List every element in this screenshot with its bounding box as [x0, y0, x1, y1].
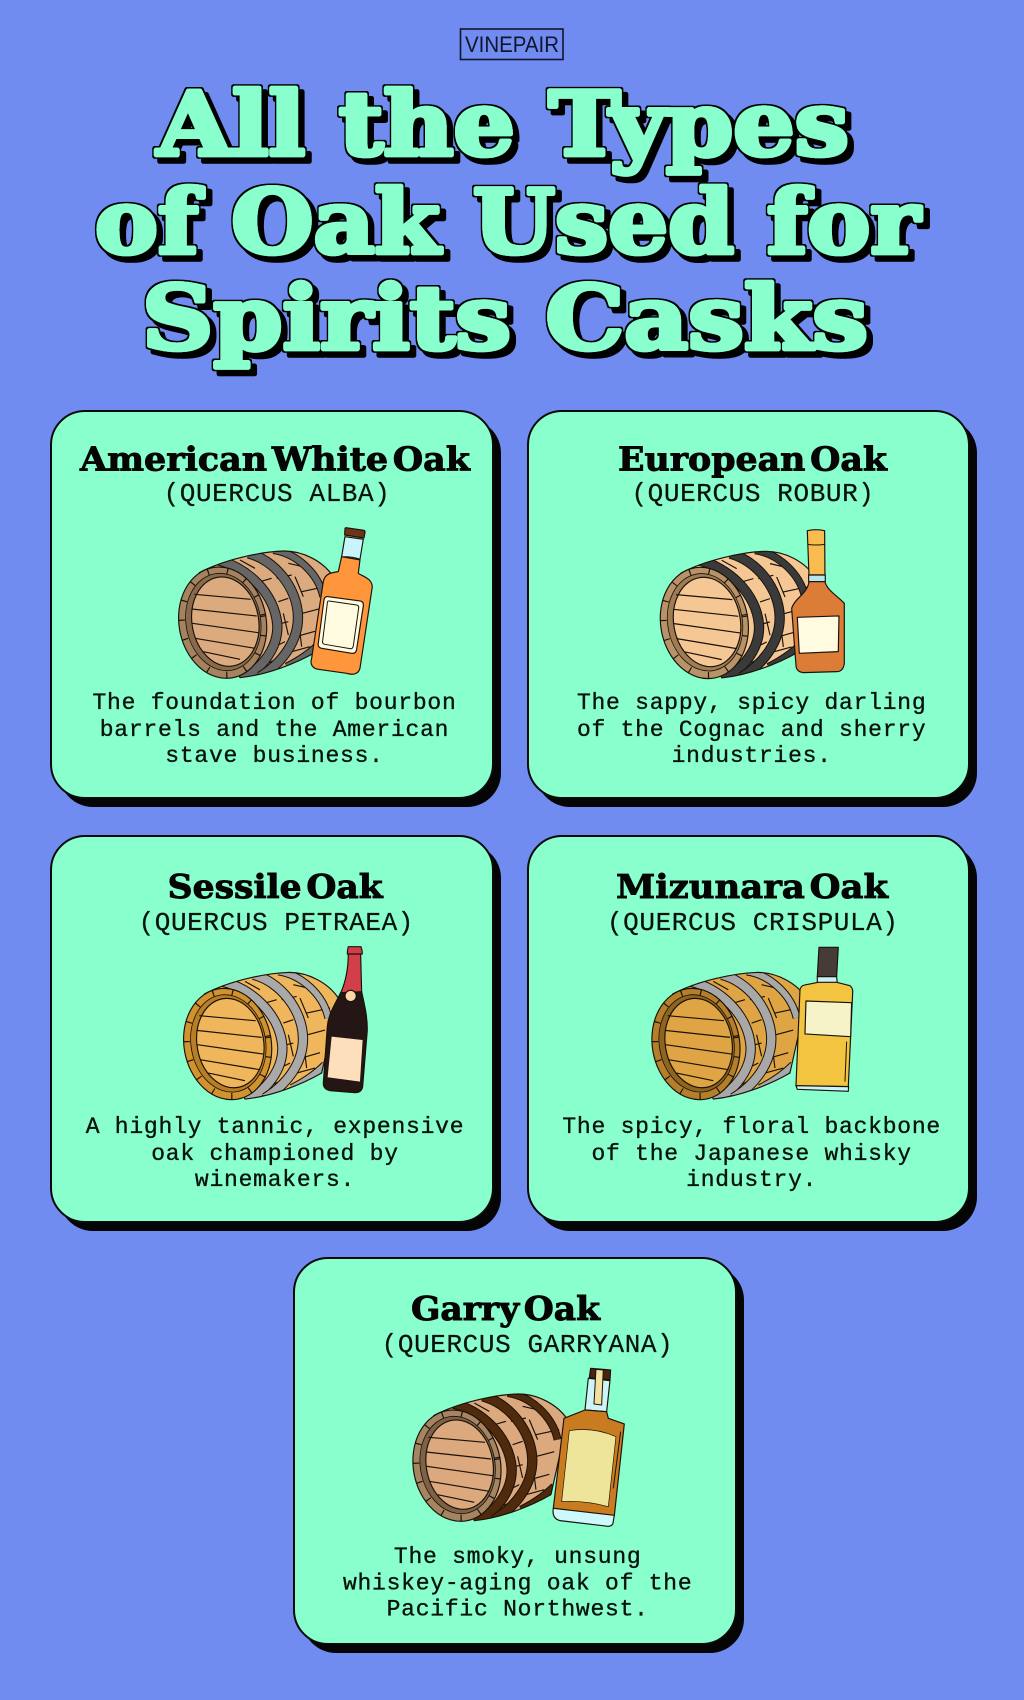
icon: barrel: [175, 971, 338, 1107]
latin name: Quercus petraea: (QUERCUS PETRAEA): [139, 908, 414, 938]
heading: Garry Oak: Garry Oak: [411, 1289, 601, 1328]
description: industry.: [686, 1167, 817, 1193]
logo: VinePair: VINEPAIR: [465, 32, 559, 57]
description: [86, 1114, 464, 1193]
description: [343, 1544, 692, 1623]
description: of the Cognac and sherry: [577, 717, 926, 743]
description: [92, 690, 457, 769]
description: [577, 690, 926, 769]
description: The smoky, unsung: [394, 1544, 641, 1570]
description: The foundation of bourbon: [92, 690, 457, 716]
icon: barrel: [170, 550, 333, 685]
title: [95, 72, 922, 370]
panel: Garry Oak: [294, 1258, 744, 1653]
heading: European Oak: European Oak: [618, 440, 888, 479]
description: of the Japanese whisky: [592, 1141, 912, 1167]
icon: whiskey bottle: [553, 1368, 624, 1526]
description: The spicy, floral backbone: [562, 1114, 941, 1140]
icon: wine bottle: [323, 947, 367, 1093]
title: All the Types: [156, 72, 849, 176]
heading: Mizunara Oak: Mizunara Oak: [616, 867, 889, 906]
panel: European Oak: [528, 411, 977, 807]
title: Spirits Casks: [142, 266, 868, 370]
latin name: Quercus garryana: (QUERCUS GARRYANA): [382, 1330, 673, 1360]
description: winemakers.: [195, 1167, 355, 1193]
panel: Mizunara Oak: [528, 836, 977, 1231]
icon: barrel: [652, 550, 815, 686]
heading: American White Oak: American White Oak: [79, 440, 471, 479]
latin name: Quercus robur: (QUERCUS ROBUR): [631, 479, 875, 509]
icon: barrel: [643, 971, 807, 1107]
description: whiskey-aging oak of the: [343, 1571, 692, 1597]
description: Pacific Northwest.: [387, 1597, 649, 1623]
heading: Sessile Oak: Sessile Oak: [168, 867, 384, 906]
description: The sappy, spicy darling: [577, 690, 926, 716]
description: oak championed by: [151, 1141, 399, 1167]
icon: orange bottle: [311, 528, 372, 674]
panel: Sessile Oak: [51, 836, 501, 1231]
description: stave business.: [165, 743, 384, 769]
icon: whisky bottle: [796, 947, 853, 1091]
title: of Oak Used for: [95, 170, 922, 274]
description: [562, 1114, 941, 1193]
icon: barrel: [404, 1393, 568, 1528]
description: barrels and the American: [100, 717, 449, 743]
description: A highly tannic, expensive: [86, 1114, 464, 1140]
description: industries.: [672, 743, 832, 769]
latin name: Quercus crispula: (QUERCUS CRISPULA): [607, 908, 899, 938]
latin name: Quercus alba: (QUERCUS ALBA): [164, 479, 390, 509]
panel: American White Oak: [51, 411, 501, 807]
icon: cognac bottle: [792, 530, 844, 673]
